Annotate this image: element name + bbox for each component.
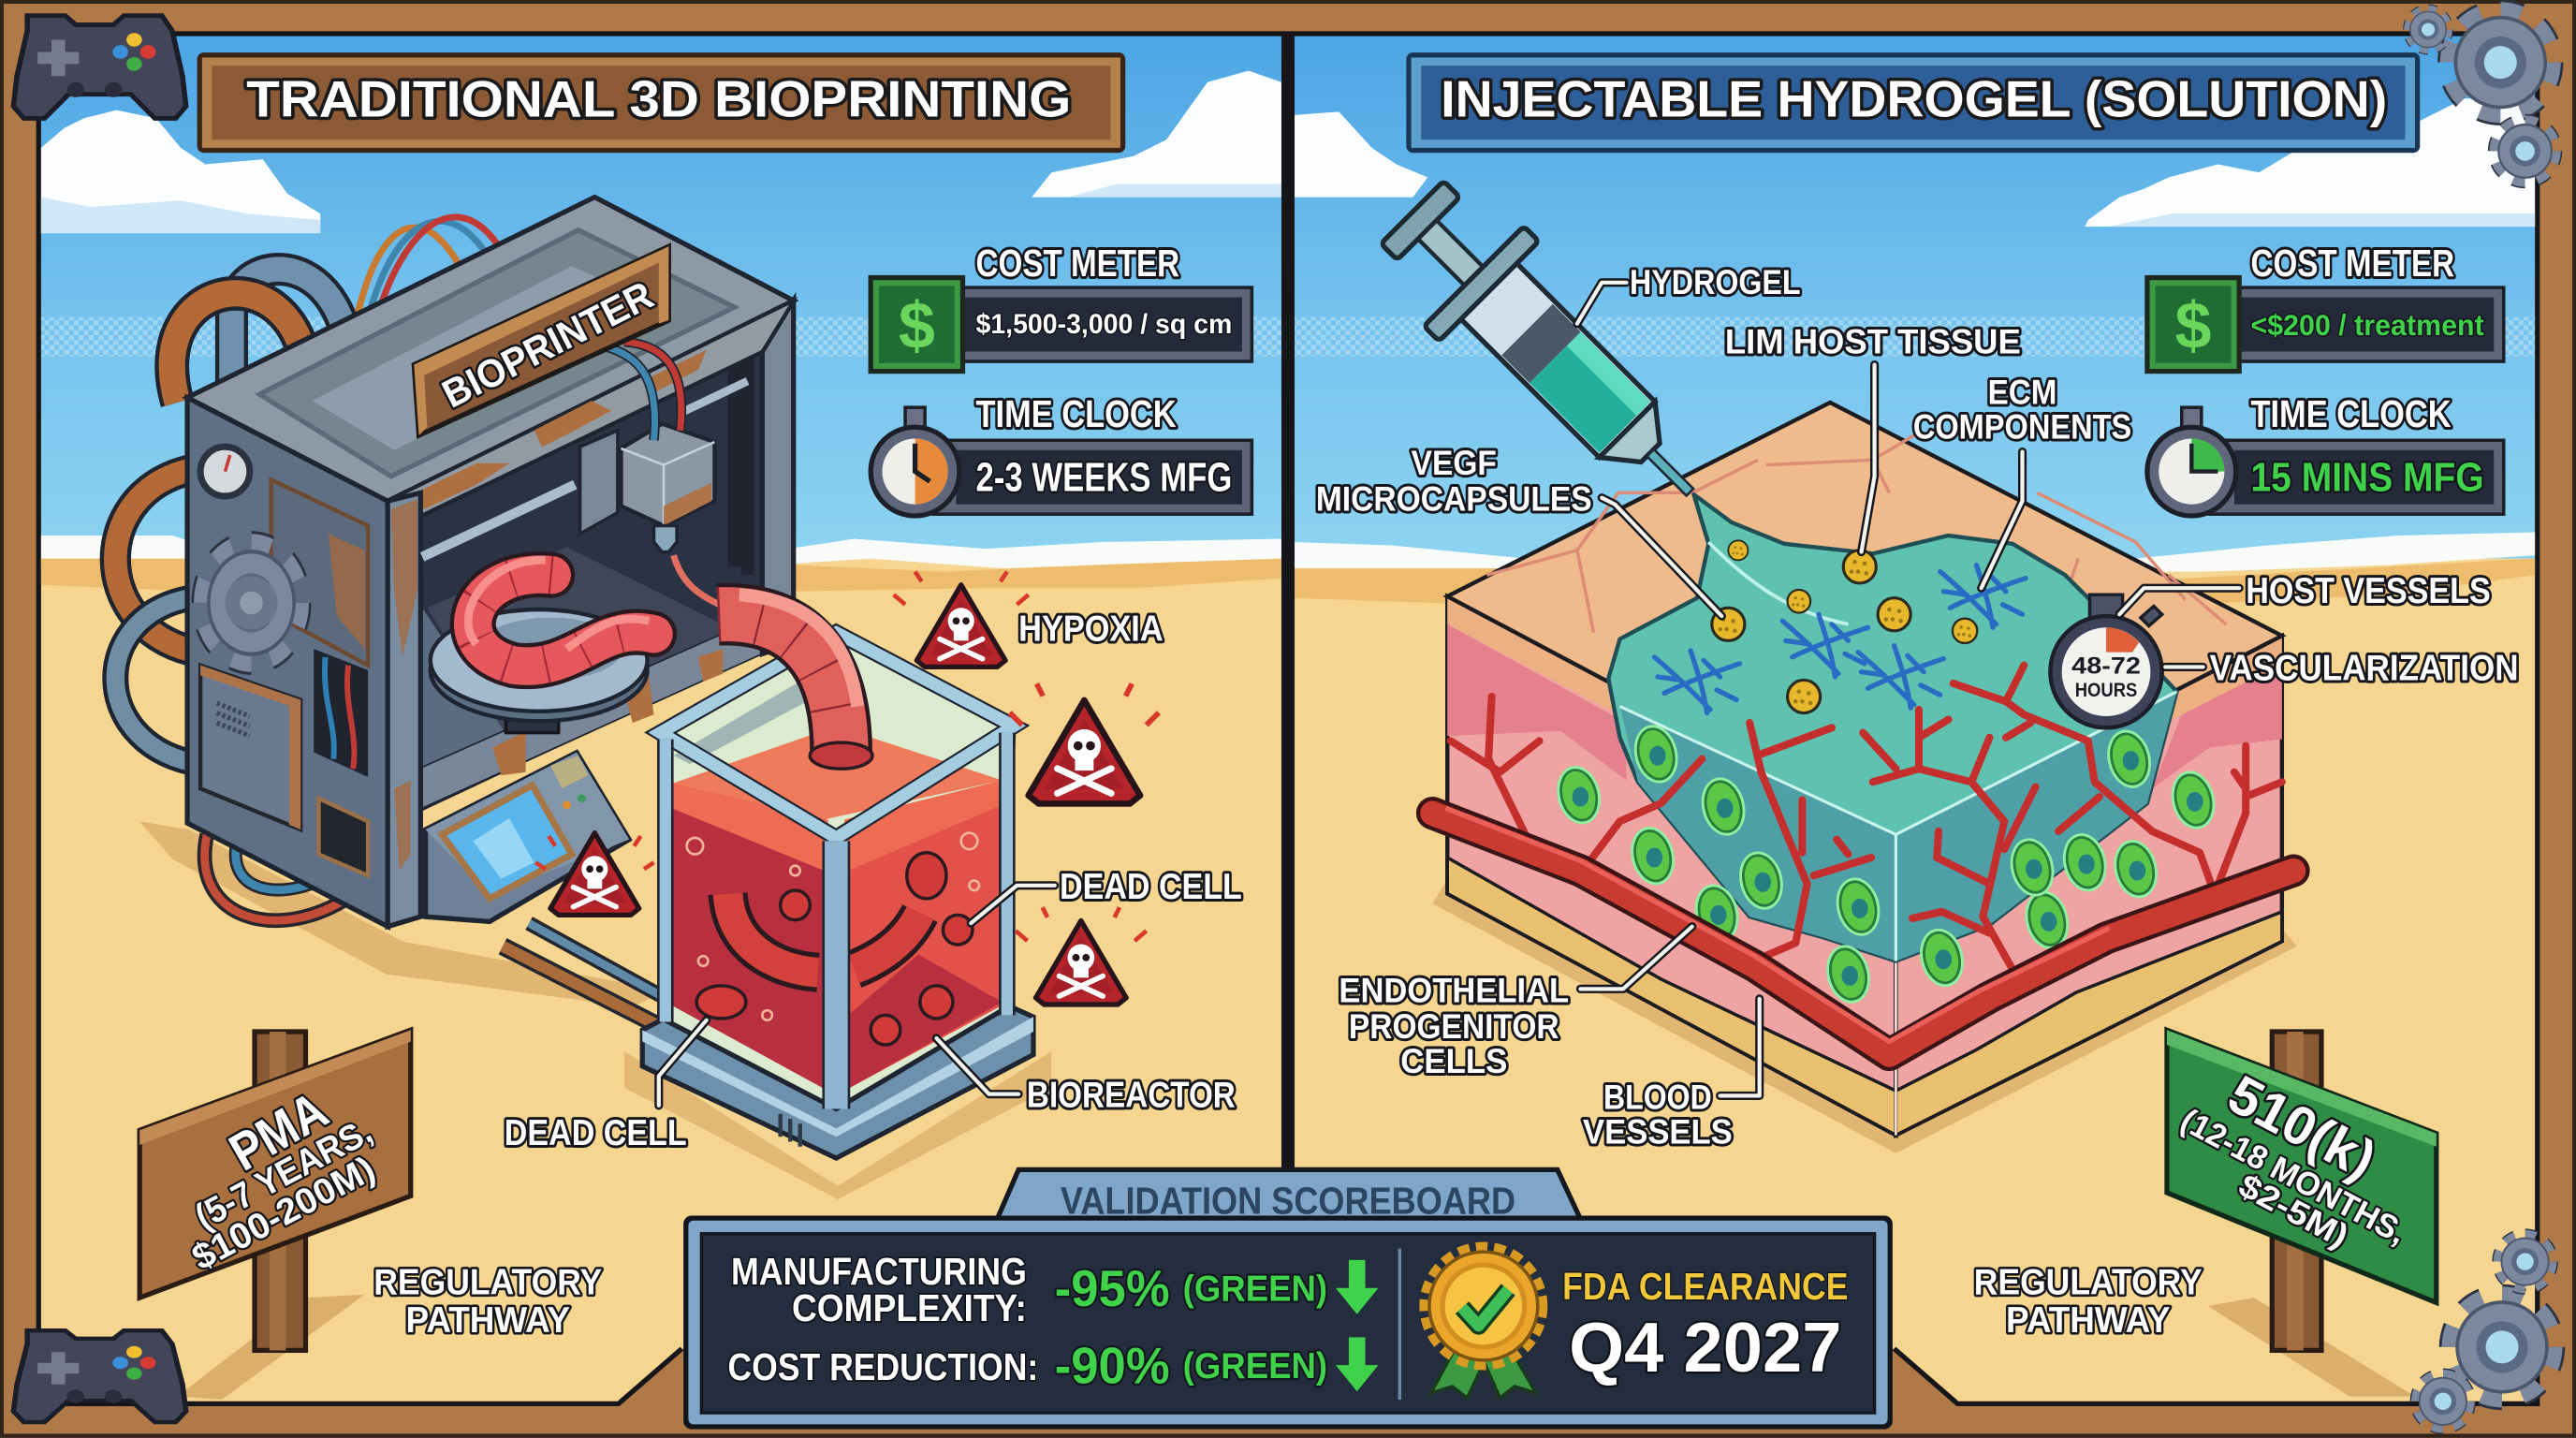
scoreboard tab: VALIDATION SCOREBOARD [1061, 1180, 1515, 1223]
metric: cost reduction [728, 1337, 1379, 1394]
label: bioreactor with leader: BIOREACTOR [1027, 1076, 1236, 1116]
label: hypoxia: HYPOXIA [1018, 609, 1164, 649]
label: host vessels: HOST VESSELS [2246, 571, 2491, 611]
sign: 510(k): $2-5M) [2232, 1167, 2354, 1255]
time clock: hydrogel: 15 MINS MFG [2250, 455, 2484, 501]
cost meter: hydrogel: <$200 / treatment [2250, 308, 2484, 342]
tube entering [718, 594, 857, 753]
sign: 510(k): 510(k) [2218, 1064, 2385, 1191]
metric: manufacturing complexity: (GREEN) [1183, 1269, 1327, 1310]
label: regulatory pathway left: PATHWAY [406, 1300, 570, 1341]
tank base [642, 928, 1033, 1158]
printed tissue horseshoe [468, 560, 654, 667]
icon: 48-72 hours stopwatch: 48-72 [2071, 653, 2141, 679]
FDA clearance date: Q4 2027 [1569, 1308, 1841, 1387]
center divider [1281, 33, 1295, 1406]
sign: PMA: $100-200M) [185, 1149, 382, 1278]
main blood vessel [1432, 814, 2293, 1055]
cost meter: hydrogel [2147, 242, 2504, 372]
metric: cost reduction: -90% [1055, 1337, 1170, 1394]
icon: stopwatch green [2147, 407, 2236, 516]
label: regulatory pathway right: PATHWAY [2006, 1300, 2171, 1341]
label: regulatory pathway right [1974, 1263, 2203, 1341]
label: regulatory pathway right: REGULATORY [1974, 1263, 2203, 1303]
collagen fibres [1654, 565, 2026, 713]
label: blood vessels: VESSELS [1583, 1112, 1733, 1151]
right upright [762, 301, 794, 653]
glass interior [661, 633, 1014, 1108]
icon: 48-72 hours stopwatch [2050, 594, 2162, 727]
dead tissue [728, 894, 920, 973]
icon: warning large [1010, 683, 1159, 803]
time clock: traditional: TIME CLOCK [976, 392, 1177, 435]
label: dead cell with leader left [505, 1020, 707, 1153]
left face [187, 398, 388, 927]
cost meter: traditional [871, 242, 1251, 372]
label: LIM host tissue: LIM HOST TISSUE [1725, 322, 2021, 360]
liquid left face [672, 784, 828, 1091]
interior floor [427, 547, 753, 731]
illustration: bioreactor tank [624, 594, 1051, 1199]
label: ECM components: COMPONENTS [1913, 408, 2131, 447]
label: ECM components [1913, 374, 2131, 588]
icon: dollar bill: $ [2175, 288, 2212, 362]
FDA clearance date [1562, 1265, 1848, 1387]
glass frame [661, 633, 1014, 838]
top face [187, 198, 794, 501]
metric: manufacturing complexity: MANUFACTURING [731, 1250, 1027, 1293]
icon: 48-72 hours stopwatch: HOURS [2075, 680, 2137, 701]
label: blood vessels [1583, 999, 1760, 1151]
metric: manufacturing complexity: COMPLEXITY: [792, 1286, 1027, 1329]
upper dermis texture [1447, 624, 2282, 788]
label: hydrogel [1577, 263, 1801, 324]
sign: PMA: PMA [220, 1079, 337, 1181]
label: hydrogel: HYDROGEL [1630, 263, 1801, 301]
cost meter: hydrogel: COST METER [2250, 242, 2454, 285]
hydrogel blob [1608, 494, 2177, 961]
label: regulatory pathway left: REGULATORY [373, 1263, 602, 1303]
gauges and panels on left face [200, 447, 250, 496]
heading: traditional 3D bioprinting: TRADITIONAL 3D BIOPRINTING [246, 71, 1071, 128]
skin side band [1447, 596, 2282, 860]
scoreboard [683, 1169, 1893, 1430]
icon: gears top-right [2408, 8, 2555, 182]
metric: manufacturing complexity [731, 1250, 1379, 1329]
pipes behind printer [115, 217, 524, 920]
FDA clearance date: FDA CLEARANCE [1562, 1265, 1848, 1308]
time clock: traditional [871, 392, 1251, 516]
icon: game controller bottom-left [13, 1330, 186, 1422]
interior [420, 352, 762, 808]
liquid surface [672, 726, 1003, 820]
illustration: syringe [1361, 164, 1740, 542]
cost meter: traditional: $1,500-3,000 / sq cm [976, 309, 1232, 340]
endothelial cells [1551, 720, 2221, 1008]
icon: warning hypoxia [894, 572, 1029, 667]
panel: injectable hydrogel background [1295, 37, 2535, 1401]
panel: traditional 3D bioprinting background [41, 37, 1281, 1401]
label: ECM components: ECM [1988, 374, 2056, 412]
right tissue face [1895, 636, 2282, 1136]
fat layer [1447, 858, 1895, 1136]
icon: dollar bill [2147, 278, 2239, 372]
illustration: tissue block [1432, 403, 2297, 1153]
name plate: BIOPRINTER [435, 272, 660, 417]
metric: cost reduction: COST REDUCTION: [728, 1345, 1038, 1388]
label: endothelial progenitor cells [1339, 927, 1692, 1080]
sign: PMA [139, 1030, 411, 1400]
label: dead cell with leader right: DEAD CELL [1060, 867, 1242, 907]
liquid right face [844, 780, 1003, 1091]
branching capillaries [1451, 666, 2282, 969]
sign: 510(k): (12-18 MONTHS, [2174, 1102, 2412, 1252]
front beam [388, 301, 794, 516]
icon: warning control panel [535, 833, 654, 915]
sign: PMA: (5-7 YEARS, [189, 1111, 379, 1238]
label: blood vessels: BLOOD [1603, 1078, 1712, 1116]
front post [388, 492, 420, 927]
label: VEGF microcapsules: MICROCAPSULES [1316, 480, 1592, 519]
time clock: traditional: 2-3 WEEKS MFG [976, 455, 1232, 501]
sign: 510(k) [2167, 1030, 2437, 1397]
feed tube [674, 555, 720, 605]
label: bioreactor with leader [936, 1038, 1236, 1116]
label: endothelial progenitor cells: ENDOTHELIAL [1339, 971, 1569, 1009]
frame wedges beside scoreboard [620, 1349, 1956, 1413]
label: host vessels [2119, 571, 2491, 614]
cost meter: traditional: COST METER [976, 242, 1179, 285]
top skin face [1447, 403, 2282, 834]
label: vascularization: VASCULARIZATION [2210, 648, 2519, 688]
gantry [422, 485, 575, 557]
heading: injectable hydrogel solution [1406, 52, 2420, 153]
left tissue face [1447, 596, 1895, 1136]
print bed [506, 703, 559, 733]
pipes to bioreactor [503, 946, 657, 1025]
icon: dollar bill [871, 278, 962, 372]
icon: clearance medal [1425, 1247, 1543, 1398]
illustration: bioprinter machine [115, 198, 794, 1025]
heading: injectable hydrogel solution: INJECTABLE HYDROGEL (SOLUTION) [1441, 71, 2387, 128]
heading: traditional 3D bioprinting [198, 52, 1125, 153]
label: dead cell with leader right [971, 867, 1242, 923]
icon: stopwatch orange [871, 407, 959, 516]
metric: manufacturing complexity: -95% [1055, 1260, 1170, 1317]
icon: gears bottom-right [2416, 1235, 2554, 1429]
metric: cost reduction: (GREEN) [1183, 1346, 1327, 1387]
time clock: hydrogel [2147, 392, 2504, 516]
hydrogel side faces [1620, 707, 1895, 961]
label: VEGF microcapsules [1316, 444, 1721, 616]
label: endothelial progenitor cells: CELLS [1400, 1042, 1507, 1080]
label: dead cell with leader left: DEAD CELL [505, 1113, 687, 1153]
VEGF microcapsules [1712, 540, 1977, 713]
time clock: hydrogel: TIME CLOCK [2250, 392, 2452, 435]
control panel [426, 753, 629, 921]
label: endothelial progenitor cells: PROGENITOR [1349, 1007, 1559, 1046]
icon: warning dead cell [1016, 907, 1147, 1005]
label: regulatory pathway left [373, 1263, 602, 1341]
icon: dollar bill: $ [899, 288, 935, 362]
icon: game controller top-left [13, 16, 186, 118]
label: LIM host tissue [1725, 322, 2021, 552]
label: VEGF microcapsules: VEGF [1412, 444, 1497, 482]
